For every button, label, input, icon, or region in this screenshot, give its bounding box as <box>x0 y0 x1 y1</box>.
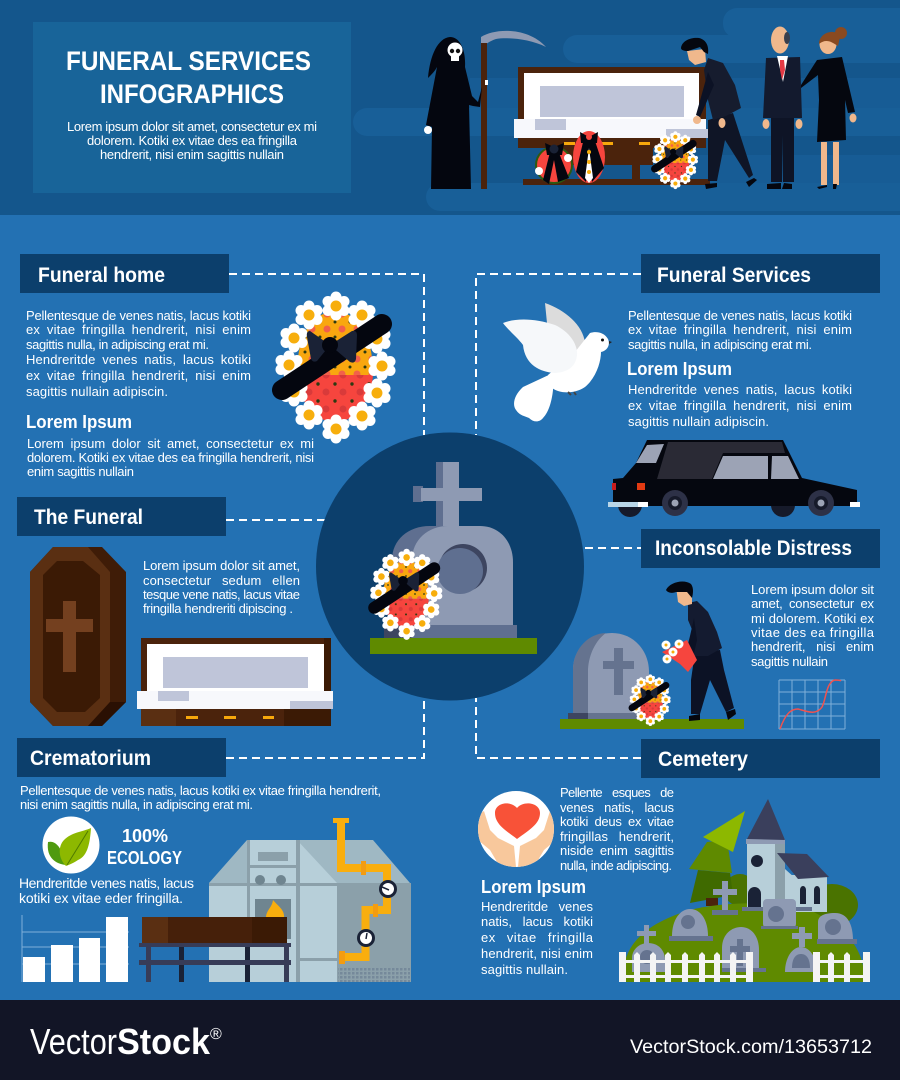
heading: funeral services <box>641 254 880 293</box>
heading: funeral home: Funeral home <box>38 264 165 287</box>
church <box>742 799 829 912</box>
illustration: crematorium building <box>139 818 411 982</box>
text block: crematorium <box>20 783 381 812</box>
intro text <box>67 119 317 162</box>
illustration: open coffin with wreaths <box>514 67 710 189</box>
white fence <box>619 952 870 982</box>
logo: vectorstock: Stock <box>117 1021 211 1062</box>
illustration: grim reaper <box>424 31 546 189</box>
text block: pellente: venes natis, lacus <box>560 800 674 815</box>
text block: hendreritde <box>481 899 594 977</box>
title: FUNERAL SERVICES <box>66 46 311 76</box>
heading: cemetery <box>641 739 880 778</box>
text block: funeral home <box>26 308 251 399</box>
subheading: Lorem Ipsum <box>627 359 732 379</box>
text block: inconsolable distress: hendrerit, nisi enim <box>751 639 874 654</box>
heading: inconsolable distress <box>641 529 880 568</box>
text block: pellente: kotiki deus ex vitae <box>560 814 674 829</box>
panel: title <box>33 22 351 193</box>
text block: funeral home: ex vitae fringilla hendrerit, nisi enim <box>26 322 251 337</box>
icon: white dove <box>503 303 612 421</box>
heading: cemetery: Cemetery <box>658 748 748 771</box>
text block: inconsolable distress: amet, consectetur ex <box>751 596 874 611</box>
text block: pellente: fringillas hendrerit, <box>560 829 674 844</box>
line chart <box>779 680 845 729</box>
text block: hendreritde: ex vitae fringilla hendrerit, nisi enim <box>628 398 852 413</box>
text block: funeral services <box>628 308 852 352</box>
icon: funeral wreath <box>276 292 396 444</box>
illustration: woman in black dress <box>801 27 856 189</box>
subheading: Lorem Ipsum <box>481 877 586 897</box>
text block: funeral home: ex vitae fringilla hendrerit, nisi enim <box>26 368 251 383</box>
gravestones <box>632 881 857 972</box>
header banner <box>0 0 900 215</box>
text block: inconsolable distress: vitae des ea fringilla <box>751 625 875 640</box>
section: cemetery <box>478 739 880 982</box>
image reference url: VectorStock.com/13653712 <box>630 1037 872 1058</box>
icon: hands holding heart <box>478 791 556 867</box>
text block: hendreritde: Hendreritde venes natis, lacus <box>19 875 194 891</box>
illustration: bald man in suit <box>762 26 802 189</box>
coffin on table <box>139 917 291 982</box>
heading: crematorium <box>17 738 226 777</box>
text block: lorem ipsum: Lorem ipsum dolor sit amet, consectetur ex mi <box>27 436 314 451</box>
text block: hendreritde: natis, lacus kotiki <box>481 914 593 929</box>
text block: funeral home: sagittis nullain adipiscin. <box>26 384 168 399</box>
text block: the funeral: Lorem ipsum dolor sit amet, <box>143 558 300 573</box>
section: funeral home <box>20 254 396 479</box>
heading: crematorium: Crematorium <box>30 747 151 770</box>
icon: mourner at grave <box>560 582 744 729</box>
logo: vectorstock <box>30 1021 222 1062</box>
text block: funeral services: ex vitae fringilla hendrerit, nisi enim <box>628 322 852 337</box>
text block: hendreritde: sagittis nullain adipiscin. <box>628 414 769 429</box>
text block: funeral services: Pellentesque de venes natis, lacus kotiki <box>628 308 852 323</box>
text block: hendreritde <box>628 382 852 429</box>
intro text: Lorem ipsum dolor sit amet, consectetur ex mi <box>67 119 317 134</box>
text block: the funeral: tesque vene natis, lacus vitae <box>143 587 300 602</box>
subheading: Lorem Ipsum <box>26 412 132 432</box>
text block: funeral home: Pellentesque de venes natis, lacus kotiki <box>26 308 251 323</box>
stat: 100% ecology: 100% <box>122 826 168 846</box>
intro text: dolorem. Kotiki ex vitae des ea fringilla <box>87 133 298 148</box>
text block: hendreritde: Hendreritde venes natis, lacus kotiki <box>628 382 852 397</box>
footer bar <box>0 1000 900 1080</box>
text block: crematorium: Pellentesque de venes natis, lacus kotiki ex vitae fringilla hendrerit, <box>20 783 381 798</box>
text block: the funeral: fringilla hendreriti dipiscing . <box>143 601 293 616</box>
heading: funeral services: Funeral Services <box>657 264 811 287</box>
text block: pellente <box>560 785 674 873</box>
text block: hendreritde: hendrerit, nisi enim <box>481 946 593 961</box>
text block: hendreritde: sagittis nullain. <box>481 962 568 977</box>
heading: inconsolable distress: Inconsolable Distress <box>655 537 852 560</box>
text block: inconsolable distress <box>751 582 875 669</box>
heading: the funeral: The Funeral <box>34 506 143 529</box>
text block: the funeral <box>143 558 300 616</box>
wreath: round right <box>652 131 698 189</box>
wreath: narrow left <box>535 143 573 184</box>
title: INFOGRAPHICS <box>100 79 284 109</box>
text block: lorem ipsum <box>27 436 314 479</box>
text block: inconsolable distress: sagittis nullain <box>751 654 828 669</box>
text block: hendreritde: kotiki ex vitae eder fringilla. <box>19 890 183 906</box>
text block: crematorium: nisi enim sagittis nulla, in adipiscing erat mi. <box>20 797 253 812</box>
text block: inconsolable distress: mi dolorem. Kotiki ex <box>751 611 874 626</box>
wreath on tombstone <box>370 549 442 640</box>
text block: pellente: Pellente esques de <box>560 785 674 800</box>
section: inconsolable distress <box>560 529 880 729</box>
logo: vectorstock: Vector <box>30 1021 117 1062</box>
section: crematorium <box>17 738 411 982</box>
intro text: hendrerit, nisi enim sagittis nullain <box>100 147 284 162</box>
icon: open coffin <box>137 638 333 726</box>
connector lines <box>226 274 641 758</box>
text block: hendreritde: Hendreritde venes <box>481 899 594 914</box>
text block: the funeral: consectetur sedum ellen <box>143 573 300 588</box>
text block: inconsolable distress: Lorem ipsum dolor sit <box>751 582 874 597</box>
text block: funeral services: sagittis nulla, in adipiscing erat mi. <box>628 337 812 352</box>
text block: funeral home: Hendreritde venes natis, lacus kotiki <box>26 352 251 367</box>
text block: pellente: niside enim sagittis <box>560 843 674 858</box>
illustration: bent mourner <box>681 38 757 189</box>
text block: lorem ipsum: dolorem. Kotiki ex vitae des ea fringilla hendrerit, nisi <box>27 450 314 465</box>
illustration: cemetery with church <box>619 799 870 982</box>
heading: funeral home <box>20 254 229 293</box>
text block: pellente: nulla, inde adipiscing. <box>560 858 672 873</box>
section: funeral services <box>503 254 880 517</box>
text block: lorem ipsum: enim sagittis nullain <box>27 464 134 479</box>
heading: the funeral <box>17 497 226 536</box>
text block: funeral home: sagittis nulla, in adipiscing erat mi. <box>26 337 209 352</box>
title <box>66 46 311 109</box>
tombstone with cross <box>370 462 537 654</box>
bar chart <box>22 915 129 982</box>
text block: hendreritde <box>19 875 194 906</box>
section: the funeral <box>17 497 333 726</box>
wreath: narrow centre <box>573 131 605 183</box>
icon: ecology leaf <box>42 816 100 874</box>
text block: hendreritde: ex vitae fringilla <box>481 930 594 945</box>
icon: closed coffin with cross <box>30 547 126 726</box>
logo: vectorstock: ® <box>210 1026 222 1043</box>
stat: 100% ecology: ECOLOGY <box>107 848 182 868</box>
central circle: tombstone <box>316 432 584 700</box>
stat: 100% ecology <box>107 826 182 868</box>
icon: hearse <box>608 440 860 517</box>
